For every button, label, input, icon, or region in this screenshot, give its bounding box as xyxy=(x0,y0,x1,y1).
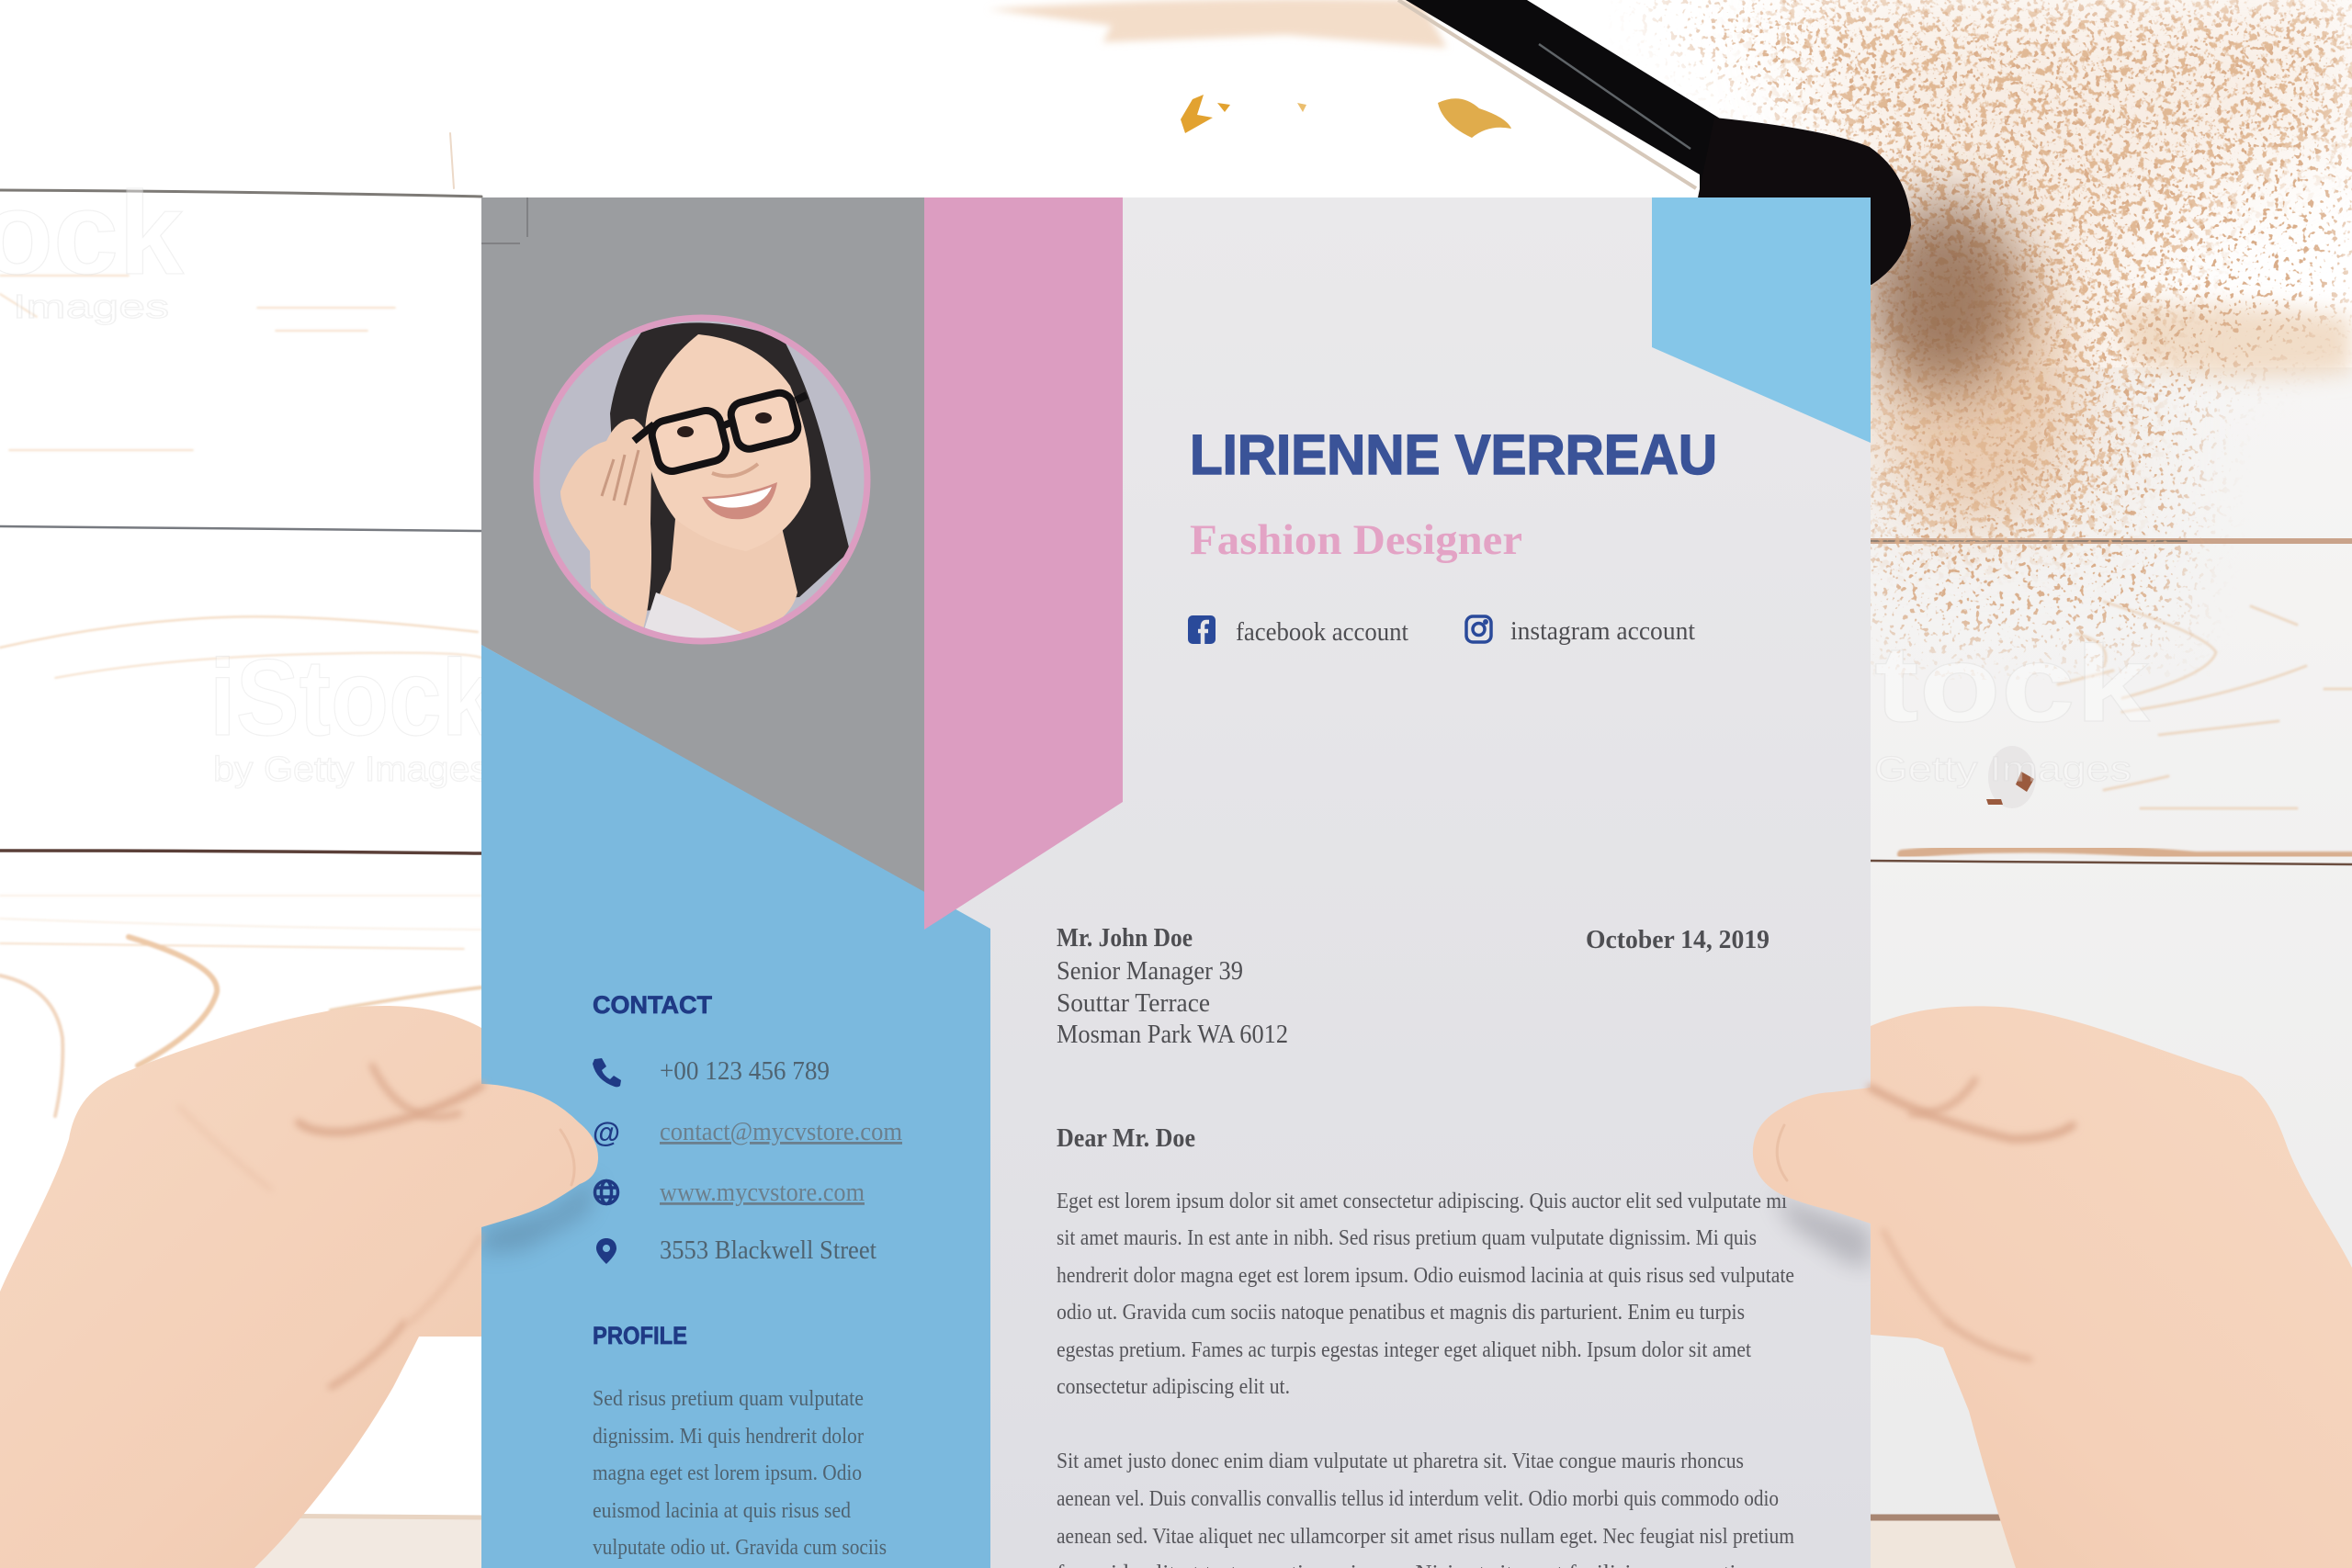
letter body paragraph 2 xyxy=(1057,1450,1794,1568)
panel: grey photo header xyxy=(481,197,924,893)
letter body paragraph 2: Sit amet justo donec enim diam vulputate ut pharetra sit. Vitae congue mauris rhoncus xyxy=(1057,1450,1744,1473)
recipient address: Senior Manager 39 xyxy=(1057,957,1243,986)
portrait photo xyxy=(535,316,869,648)
date: October 14, 2019 xyxy=(1586,926,1770,954)
profile text: magna eget est lorem ipsum. Odio xyxy=(593,1461,862,1485)
watermark: stock photo text: by Getty Images xyxy=(213,750,489,789)
facebook label: facebook account xyxy=(1236,618,1408,647)
makeup brush xyxy=(1398,0,1911,285)
heading: profile: PROFILE xyxy=(593,1322,687,1349)
letter body paragraph 1: Eget est lorem ipsum dolor sit amet consectetur adipiscing. Quis auctor elit sed vulputate mi xyxy=(1057,1190,1787,1213)
watermark: stock photo text xyxy=(0,168,2150,789)
thumb shadows xyxy=(481,1176,1871,1268)
profile text: dignissim. Mi quis hendrerit dolor xyxy=(593,1425,864,1449)
letter body paragraph 1 xyxy=(1057,1190,1794,1399)
phone number: +00 123 456 789 xyxy=(660,1057,830,1086)
crop mark xyxy=(481,197,527,243)
profile text: vulputate odio ut. Gravida cum sociis xyxy=(593,1536,887,1560)
chest and neck xyxy=(660,519,797,633)
icon: at sign: @ xyxy=(593,1116,620,1148)
glasses xyxy=(649,390,800,474)
icon: location pin xyxy=(596,1238,616,1264)
hair back xyxy=(610,322,850,611)
recipient address xyxy=(1057,924,1288,1049)
left hand xyxy=(0,1006,598,1568)
letter body paragraph 1: hendrerit dolor magna eget est lorem ipsum. Odio euismod lacinia at quis risus sed vulputate xyxy=(1057,1264,1794,1288)
watermark: stock photo text: tock xyxy=(1874,624,2150,745)
letter body paragraph 1: egestas pretium. Fames ac turpis egestas integer eget aliquet nibh. Ipsum dolor sit amet xyxy=(1057,1338,1751,1362)
foundation streaks xyxy=(988,0,1447,48)
address: 3553 Blackwell Street xyxy=(660,1236,876,1265)
heading: contact: CONTACT xyxy=(593,991,713,1019)
letter body paragraph 2: aenean sed. Vitae aliquet nec ullamcorper sit amet risus nullam eget. Nec feugiat nisl pretium xyxy=(1057,1525,1794,1549)
recipient address: Mosman Park WA 6012 xyxy=(1057,1021,1288,1049)
instagram label: instagram account xyxy=(1510,617,1695,646)
icon: instagram xyxy=(1466,616,1491,642)
face xyxy=(645,334,810,551)
right hand xyxy=(1753,1006,2352,1568)
recipient address: Souttar Terrace xyxy=(1057,989,1210,1018)
email link: contact@mycvstore.com xyxy=(660,1118,902,1146)
panel: pink ribbon xyxy=(924,197,1123,930)
salutation: Dear Mr. Doe xyxy=(1057,1124,1195,1153)
letter body paragraph 1: consectetur adipiscing elit ut. xyxy=(1057,1375,1290,1399)
eyes xyxy=(677,426,694,437)
watermark: stock photo text: Images xyxy=(13,288,169,325)
letter body paragraph 2: aenean vel. Duis convallis convallis tellus id interdum velit. Odio morbi quis commodo odio xyxy=(1057,1487,1779,1511)
icon: facebook xyxy=(1188,615,1216,644)
icon: phone xyxy=(593,1058,621,1087)
letter body paragraph 1: sit amet mauris. In est ante in nibh. Sed risus pretium quam vulputate dignissim. Mi quis xyxy=(1057,1226,1757,1250)
watermark: stock photo text: Getty Images xyxy=(1874,750,2132,789)
nose xyxy=(712,464,758,476)
hand at glasses xyxy=(560,419,651,629)
profile text xyxy=(593,1387,887,1560)
icon: globe xyxy=(595,1181,617,1203)
smile xyxy=(702,482,777,519)
profile text: euismod lacinia at quis risus sed xyxy=(593,1499,851,1523)
website link: www.mycvstore.com xyxy=(660,1179,865,1207)
paper sheet xyxy=(481,197,1871,1568)
orange powder flecks xyxy=(1181,95,1511,138)
panel: blue sidebar xyxy=(481,645,990,1568)
panel: blue corner xyxy=(1652,197,1871,443)
profile text: Sed risus pretium quam vulputate xyxy=(593,1387,864,1411)
letter body paragraph 1: odio ut. Gravida cum sociis natoque penatibus et magnis dis parturient. Enim eu turpis xyxy=(1057,1301,1745,1325)
heading: name: LIRIENNE VERREAU xyxy=(1190,423,1717,486)
loose powder xyxy=(1608,0,2352,680)
heading: job title: Fashion Designer xyxy=(1190,516,1522,564)
recipient address: Mr. John Doe xyxy=(1057,924,1193,953)
white top xyxy=(645,592,742,637)
watermark: stock photo text: iStock xyxy=(209,637,494,759)
